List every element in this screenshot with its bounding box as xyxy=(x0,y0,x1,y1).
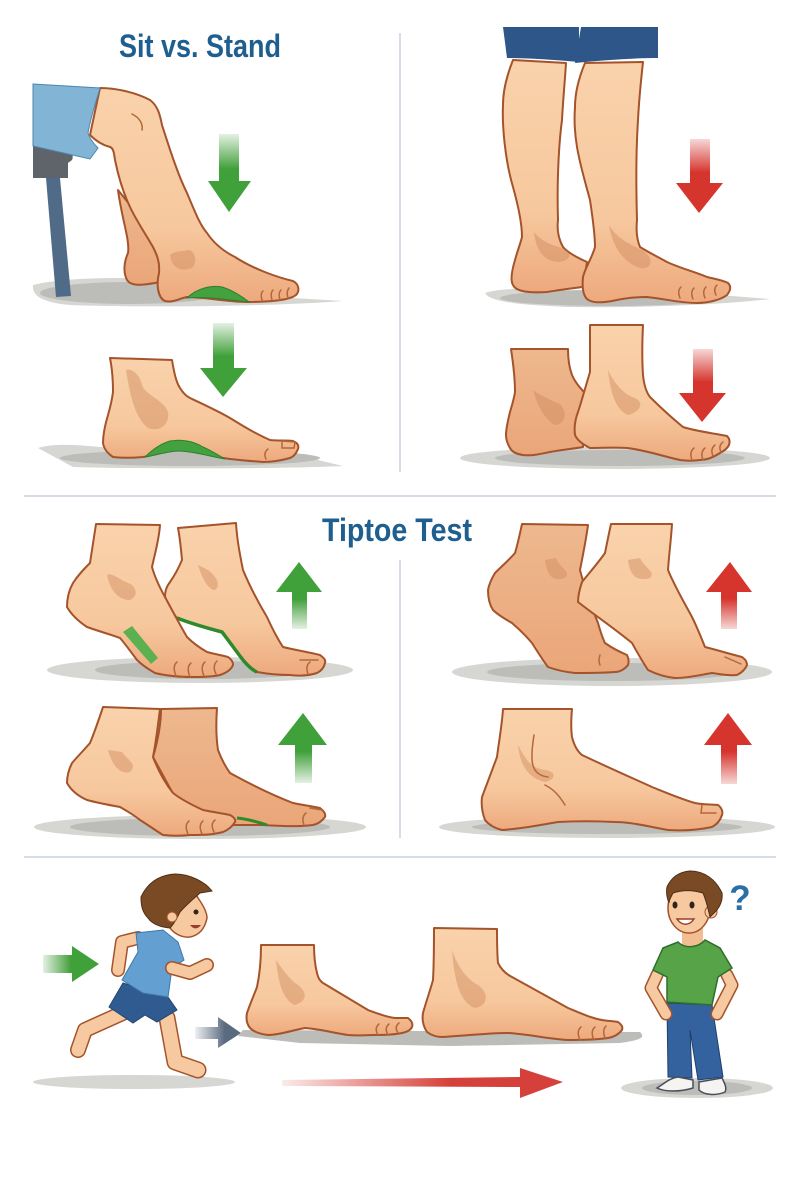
panel: flat foot right bottom xyxy=(439,709,775,838)
arrow: green down xyxy=(200,323,247,397)
shirt xyxy=(653,940,732,1005)
jeans xyxy=(667,1003,723,1080)
icon: chair xyxy=(33,146,73,297)
panel: standing legs xyxy=(485,27,770,307)
hair xyxy=(667,871,722,917)
head xyxy=(168,888,207,937)
arrow: green right xyxy=(43,946,99,982)
green arch edge xyxy=(177,618,257,672)
panel: two feet comparison xyxy=(238,928,642,1046)
front leg xyxy=(167,1018,198,1070)
green arch xyxy=(187,286,249,302)
arrow: red up xyxy=(706,562,752,629)
arms xyxy=(651,975,732,1014)
arrow: long red right xyxy=(282,1068,563,1098)
front leg xyxy=(90,88,298,302)
green strip xyxy=(123,626,158,664)
arrow: green up xyxy=(278,713,327,783)
back leg xyxy=(118,190,175,285)
panel: sitting foot close-up xyxy=(38,358,343,468)
panel: standing boy xyxy=(621,871,773,1098)
green arch trace xyxy=(237,818,267,825)
shirt xyxy=(122,930,184,997)
shorts xyxy=(109,983,177,1023)
shoes xyxy=(657,1077,726,1094)
panel: tiptoe left top xyxy=(47,523,353,683)
back leg xyxy=(78,1012,125,1050)
panel: standing feet close-up xyxy=(460,325,770,469)
heading: Sit vs. Stand: Sit vs. Stand xyxy=(119,28,281,64)
shorts xyxy=(33,84,100,159)
arrow: grey right xyxy=(195,1017,241,1048)
head xyxy=(668,883,710,933)
arrow: green down xyxy=(208,134,251,212)
front leg xyxy=(575,62,730,303)
neck xyxy=(682,928,703,946)
arrow: green up xyxy=(276,562,322,629)
arrow: red up xyxy=(704,713,752,784)
panel: tiptoe right top xyxy=(452,524,772,686)
front arm xyxy=(172,965,207,973)
green arch xyxy=(145,440,225,459)
hair xyxy=(141,874,212,928)
arrow: red down xyxy=(676,139,723,213)
back arm xyxy=(118,938,138,970)
heading: Tiptoe Test: Tiptoe Test xyxy=(322,512,472,548)
question mark: ? xyxy=(729,879,751,918)
shorts xyxy=(503,27,658,63)
panel: tiptoe left bottom xyxy=(34,707,366,839)
arrow: red down xyxy=(679,349,726,422)
panel: seated foot with arch xyxy=(33,84,343,306)
panel: running boy xyxy=(33,874,235,1089)
back leg xyxy=(503,60,587,292)
